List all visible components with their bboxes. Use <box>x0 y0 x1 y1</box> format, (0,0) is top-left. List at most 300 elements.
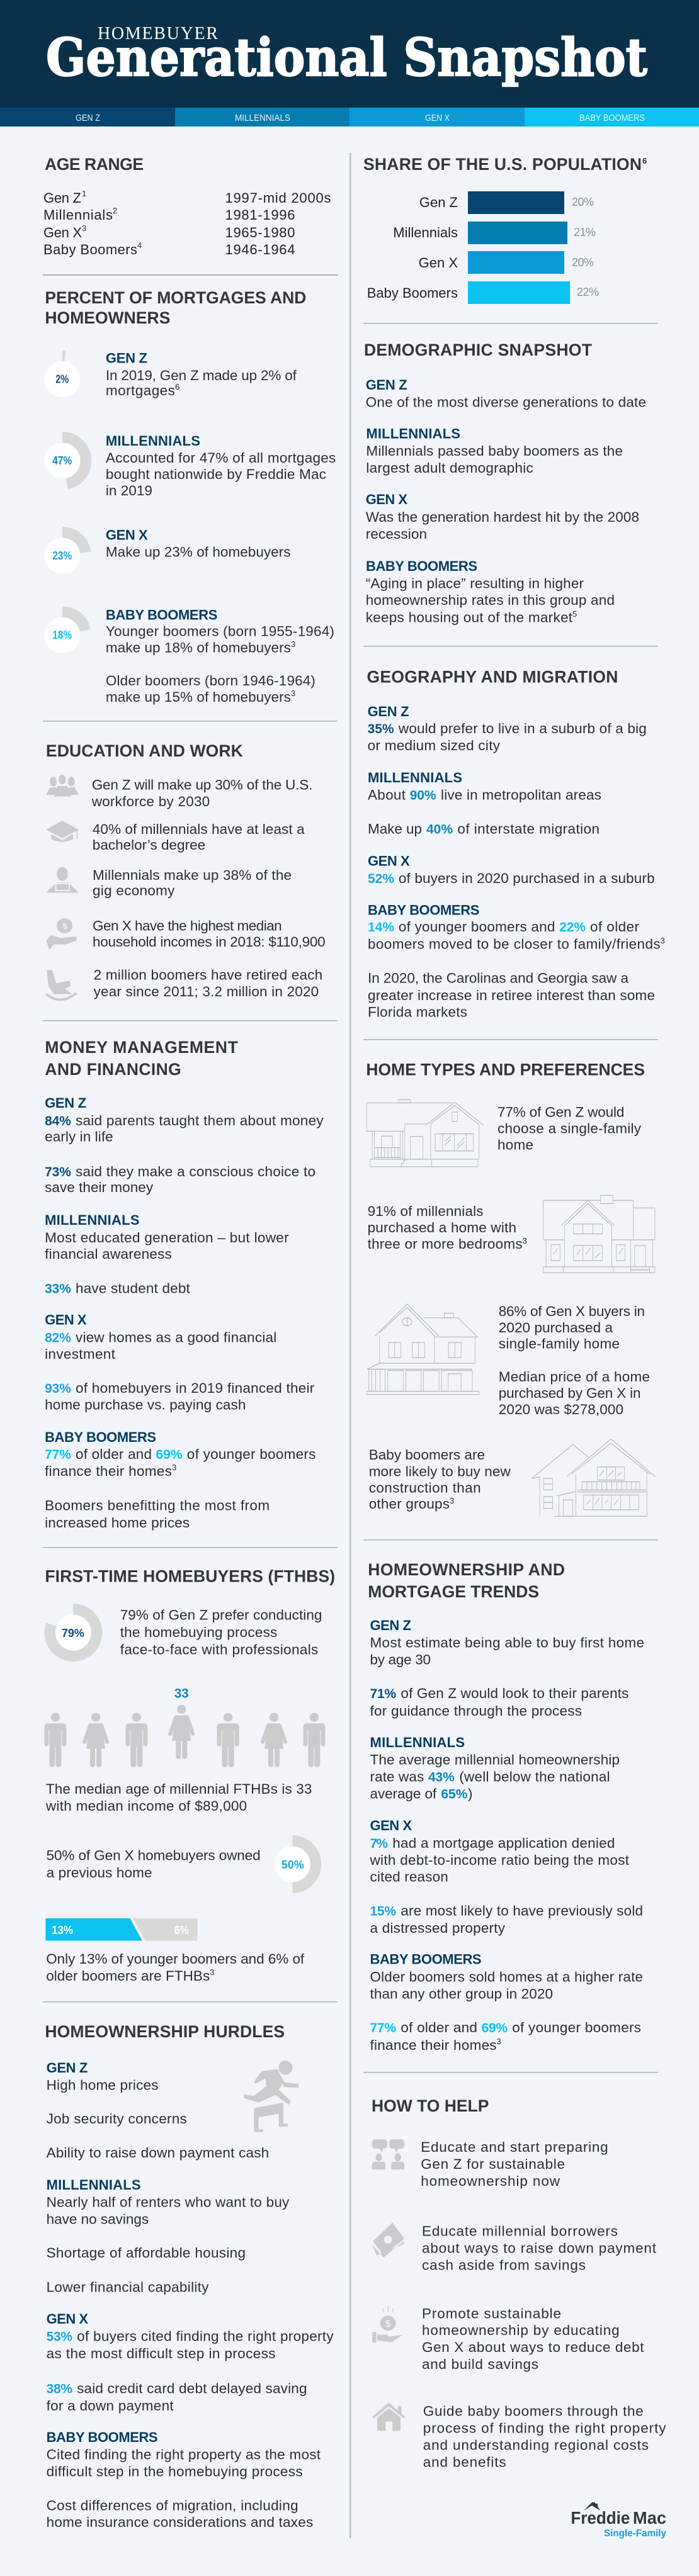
panel: homeownership and mortgage trends <box>368 1560 644 2053</box>
text block: millennials: have no savings <box>47 2212 149 2227</box>
panel: home types and preferences <box>366 1060 656 1516</box>
text block: gen x: 53% <box>47 2330 72 2344</box>
donut: millennials 47%: 47% <box>52 454 72 467</box>
text block: baby boomers: boomers moved to be closer to family/friends <box>368 936 661 952</box>
text: boomers new construction: more likely to buy new <box>369 1464 511 1479</box>
text block: gen x: home purchase vs. paying cash <box>45 1397 246 1412</box>
text block: millennials: MILLENNIALS <box>45 1212 139 1228</box>
panel: how to help <box>372 2096 666 2470</box>
text: gen x previous home: a previous home <box>47 1865 152 1881</box>
text: boomers retired <box>94 967 322 999</box>
age table: Gen X <box>43 225 82 240</box>
generation legend band <box>0 108 699 127</box>
text block: baby boomers: difficult step in the homebuying process <box>47 2464 303 2480</box>
text block: baby boomers: greater increase in retiree interest than some <box>368 987 655 1003</box>
text block: baby boomers: 69% <box>156 1448 183 1462</box>
text block: baby boomers: homeownership rates in this group and <box>366 592 615 608</box>
heading: percent of mortgages: HOMEOWNERS <box>45 308 170 327</box>
text: bachelor's degree: 40% of millennials have at least a <box>93 821 305 837</box>
panel: money management and financing <box>45 1038 324 1531</box>
text: gen x: Make up 23% of homebuyers <box>106 544 291 560</box>
text: gen x home: single-family home <box>499 1336 620 1352</box>
text block: baby boomers: finance their homes <box>45 1463 172 1479</box>
text block: millennials <box>45 1212 289 1296</box>
text block: millennials: largest adult demographic <box>366 460 533 476</box>
icon: house 2 <box>543 1195 655 1273</box>
text block: baby boomers: Older boomers sold homes at a higher rate <box>370 1969 643 1985</box>
text: gen x home <box>499 1303 650 1417</box>
text block: gen z: GEN Z <box>368 704 409 719</box>
text block: gen x: with debt-to-income ratio being the most <box>369 1852 630 1868</box>
heading: homeownership hurdles: HOMEOWNERSHIP HURDLES <box>45 2022 285 2041</box>
text: baby boomers: Older boomers (born 1946-1964) <box>106 673 315 689</box>
text block: baby boomers: of younger boomers <box>512 2020 641 2035</box>
age table: 2 <box>113 206 117 215</box>
text block: gen z: One of the most diverse generations to date <box>366 394 646 410</box>
text: gig economy: Millennials make up 38% of the <box>93 867 292 883</box>
text block: millennials: financial awareness <box>45 1246 172 1262</box>
text: millennial bedrooms <box>368 1203 527 1252</box>
text block: gen z: GEN Z <box>47 2060 88 2076</box>
text block: baby boomers: BABY BOOMERS <box>366 558 477 574</box>
text block: gen x: GEN X <box>366 492 407 507</box>
donut: baby boomers 18%: 18% <box>52 629 72 641</box>
text block: gen x: a distressed property <box>370 1920 506 1936</box>
text: gen x home: 2020 purchased a <box>499 1320 613 1336</box>
icon: group of people <box>46 775 79 797</box>
bar chart <box>367 191 599 304</box>
text block: gen x: had a mortgage application denied <box>392 1835 615 1851</box>
icon: hand with dollar coin: $ <box>385 2319 391 2329</box>
text block: gen z <box>45 1095 324 1195</box>
icon: hand with dollar coin <box>372 2306 403 2343</box>
text block: gen x <box>45 1312 315 1412</box>
text block: millennials: ) <box>468 1786 472 1801</box>
age table <box>43 189 331 257</box>
text block: baby boomers: 3 <box>661 936 665 945</box>
age table: 1997-mid 2000s <box>225 190 331 206</box>
text block: baby boomers: “Aging in place” resulting in higher <box>366 576 584 592</box>
text block: millennials: MILLENNIALS <box>368 770 462 785</box>
text block: gen x <box>366 492 639 542</box>
text block: baby boomers: than any other group in 2020 <box>370 1986 553 2002</box>
icon: hand with coin: $ <box>62 921 67 931</box>
text: household incomes: Gen X have the highest median <box>93 918 282 934</box>
text: gen x home: Median price of a home <box>499 1369 650 1385</box>
text: millennial help: about ways to raise down payment <box>422 2241 657 2256</box>
pictogram: row of people with median age: 33 <box>174 1686 189 1701</box>
text block: gen z: for guidance through the process <box>370 1703 582 1719</box>
donut: 50%: 50% <box>281 1859 304 1871</box>
text block: gen z <box>370 1617 644 1719</box>
text: gen x: GEN X <box>106 527 148 543</box>
text: baby boomers <box>106 607 334 705</box>
generation legend band: GEN Z <box>76 113 100 123</box>
donut: 79% <box>44 1604 102 1662</box>
text: gen x home: purchased by Gen X in <box>499 1385 641 1401</box>
text block: gen x: 82% <box>45 1330 71 1346</box>
text block: gen x: GEN X <box>47 2311 88 2327</box>
text block: millennials: The average millennial homeownership <box>370 1752 620 1768</box>
text: millennials <box>106 433 336 498</box>
text block: millennials: 65% <box>441 1787 468 1801</box>
header banner <box>0 0 699 108</box>
main title: Generational Snapshot <box>46 28 647 88</box>
text block: gen z: Ability to raise down payment cash <box>47 2145 269 2161</box>
text: millennial help <box>422 2224 657 2273</box>
text: gen z home: home <box>497 1137 533 1153</box>
text block: millennials <box>370 1735 620 1801</box>
text block: baby boomers: 22% <box>559 920 586 935</box>
text block: baby boomers: 77% <box>45 1448 71 1462</box>
bar chart: Millennials <box>393 225 458 240</box>
text block: millennials: MILLENNIALS <box>370 1735 465 1750</box>
text block: gen x: for a down payment <box>47 2398 174 2414</box>
icon: house <box>372 2403 406 2431</box>
text block: millennials: 90% <box>410 788 436 802</box>
text block: gen z <box>368 704 647 753</box>
text block: millennials: 40% <box>426 822 453 836</box>
text block: baby boomers: Cost differences of migration, including <box>47 2498 298 2514</box>
text block: gen x: cited reason <box>370 1869 448 1885</box>
text block: gen z: said parents taught them about money <box>76 1113 324 1128</box>
text: boomers help: and understanding regional costs <box>423 2437 649 2453</box>
text: face-to-face: face-to-face with professionals <box>120 1641 318 1658</box>
text block: gen x: 52% <box>368 872 394 886</box>
logo: Freddie Mac Single-Family: Freddie <box>571 2508 630 2528</box>
text: baby boomers: Younger boomers (born 1955-1964) <box>106 624 334 639</box>
heading: money management <box>45 1038 238 1079</box>
text: boomers FTHBs <box>46 1951 305 1984</box>
text block: millennials: 33% <box>45 1281 71 1296</box>
text block: millennials: Millennials passed baby boomers as the <box>366 443 623 459</box>
text block: millennials <box>368 770 601 836</box>
text: workforce: workforce by 2030 <box>91 794 210 809</box>
eyebrow title: HOMEBUYER <box>98 24 218 43</box>
text block: gen x: investment <box>45 1346 116 1362</box>
text block: gen z: 73% <box>45 1165 71 1179</box>
text: boomers new construction <box>369 1447 511 1512</box>
text block: baby boomers <box>370 1952 643 2053</box>
text block: gen z: High home prices <box>47 2078 158 2093</box>
generation legend band: BABY BOOMERS <box>579 113 645 123</box>
text block: gen x <box>47 2311 334 2414</box>
age table: 3 <box>82 223 86 233</box>
text: boomers help: Guide baby boomers through the <box>423 2403 644 2419</box>
text block: gen z <box>366 377 646 410</box>
bar chart: Gen Z <box>419 194 458 210</box>
text: baby boomers: 3 <box>291 689 295 698</box>
text: baby boomers: BABY BOOMERS <box>106 607 217 623</box>
text: millennials: bought nationwide by Freddie Mac <box>106 466 326 482</box>
age table: 1965-1980 <box>225 225 295 240</box>
icon: hurdle jumper <box>244 2061 298 2132</box>
bar chart: 21% <box>574 226 596 239</box>
text: gen z help: Educate and start preparing <box>421 2139 608 2155</box>
text: millennial bedrooms: purchased a home with <box>368 1220 516 1235</box>
donut: gen z 2% <box>44 351 81 397</box>
text block: gen x: of buyers in 2020 purchased in a suburb <box>399 870 655 886</box>
text: millennial bedrooms: three or more bedrooms <box>368 1236 523 1252</box>
text: gen x home: 86% of Gen X buyers in <box>499 1303 645 1319</box>
split bar: 13% and 6% <box>45 1918 198 1941</box>
text block: gen x: GEN X <box>370 1818 412 1833</box>
text block: gen z: 35% <box>368 722 394 736</box>
text: boomers retired: year since 2011; 3.2 million in 2020 <box>94 984 319 999</box>
text block: gen z: save their money <box>45 1179 154 1195</box>
text: boomers new construction: construction than <box>369 1480 481 1496</box>
icon: person at laptop <box>46 867 79 892</box>
text: median age: The median age of millennial FTHBs is 33 <box>46 1781 312 1797</box>
text: gen x help: Gen X about ways to reduce debt <box>422 2339 644 2355</box>
text block: gen z: would prefer to live in a suburb of a big <box>398 721 647 736</box>
text block: gen x: said credit card debt delayed saving <box>77 2381 307 2397</box>
text: face-to-face: the homebuying process <box>120 1624 277 1640</box>
text block: millennials: Most educated generation – but lower <box>45 1230 289 1246</box>
heading: first-time homebuyers: FIRST-TIME HOMEBUYERS (FTHBS) <box>45 1567 335 1586</box>
text: gen z: In 2019, Gen Z made up 2% of <box>106 368 297 383</box>
text block: baby boomers: of older and <box>401 2020 477 2035</box>
text: boomers FTHBs: 3 <box>210 1967 214 1977</box>
icon: house 4 <box>531 1439 656 1516</box>
age table: Gen Z <box>43 190 81 206</box>
text: boomers retired: 2 million boomers have retired each <box>94 967 322 983</box>
text block: gen x: 7% <box>370 1836 388 1851</box>
text: boomers help: process of finding the right property <box>423 2420 666 2436</box>
panel: education and work <box>46 741 326 999</box>
icon: hand with coin <box>46 918 76 950</box>
bar chart: Baby Boomers <box>367 285 458 301</box>
text: boomers help <box>423 2403 666 2470</box>
text block: gen x: Was the generation hardest hit by the 2008 <box>366 509 639 525</box>
text block: baby boomers: 14% <box>368 920 394 935</box>
icon: speech bubbles and people <box>372 2139 404 2169</box>
text block: gen z: GEN Z <box>366 377 407 393</box>
text block: gen z: 84% <box>45 1114 71 1128</box>
text block: millennials: have student debt <box>76 1280 191 1296</box>
donut: millennials 47% <box>44 432 91 489</box>
age table: 1 <box>82 189 86 198</box>
text block: millennials: About <box>368 787 406 802</box>
text block: millennials: (well below the national <box>459 1769 610 1785</box>
text: millennials: Accounted for 47% of all mortgages <box>106 450 336 466</box>
text: gig economy <box>93 867 292 899</box>
heading: homeownership and mortgage trends: MORTGAGE TRENDS <box>368 1582 539 1601</box>
text: face-to-face: 79% of Gen Z prefer conducting <box>120 1607 322 1623</box>
text block: millennials: Lower financial capability <box>47 2280 209 2295</box>
donut: gen x 23%: 23% <box>52 549 72 562</box>
heading: percent of mortgages: PERCENT OF MORTGAGES AND <box>45 288 306 307</box>
text block: baby boomers: increased home prices <box>45 1515 190 1531</box>
text block: gen x <box>369 1818 643 1936</box>
text block: gen x: GEN X <box>45 1312 87 1328</box>
text: boomers new construction: other groups <box>369 1496 450 1512</box>
text block: millennials: average of <box>370 1786 437 1801</box>
heading: home types: HOME TYPES AND PREFERENCES <box>366 1060 645 1079</box>
text block: baby boomers: Florida markets <box>368 1004 467 1020</box>
text block: gen z: or medium sized city <box>368 738 501 753</box>
text: household incomes <box>93 918 326 950</box>
text block: baby boomers <box>368 902 665 1020</box>
text block: baby boomers <box>47 2429 321 2530</box>
text: gen z: GEN Z <box>106 351 147 366</box>
text block: gen x: recession <box>366 526 427 542</box>
panel: percent of mortgages and homeowners <box>44 288 336 705</box>
text: boomers FTHBs: older boomers are FTHBs <box>46 1968 210 1984</box>
bar chart: 20% <box>572 256 594 269</box>
pictogram: row of people with median age <box>44 1686 325 1767</box>
text block: millennials <box>47 2177 290 2295</box>
text: gen z <box>106 351 297 398</box>
text block: baby boomers: of older <box>590 919 640 935</box>
text block: millennials: 43% <box>428 1770 455 1785</box>
split bar: 13% and 6%: 13% <box>52 1924 73 1937</box>
text block: millennials: Nearly half of renters who want to buy <box>47 2195 290 2210</box>
text: gen z home: 77% of Gen Z would <box>497 1104 624 1120</box>
text block: millennials: MILLENNIALS <box>47 2177 141 2193</box>
text block: millennials <box>366 426 623 476</box>
panel: age range <box>43 155 331 257</box>
bar chart: Gen X <box>419 255 458 271</box>
text block: baby boomers: finance their homes <box>370 2037 497 2053</box>
text block: baby boomers: 77% <box>370 2021 396 2035</box>
panel: homeownership hurdles <box>45 2022 334 2530</box>
text: gig economy: gig economy <box>93 883 175 899</box>
heading: age range: AGE RANGE <box>45 155 144 174</box>
text block: gen x: 93% <box>45 1381 71 1396</box>
text block: gen x: GEN X <box>368 853 410 869</box>
age table: Baby Boomers <box>43 242 137 257</box>
text: boomers help: and benefits <box>423 2454 506 2470</box>
text: gen z help <box>421 2139 608 2189</box>
text block: millennials: of interstate migration <box>457 821 600 836</box>
text: median age: with median income of $89,000 <box>45 1798 247 1814</box>
text: gen x <box>106 527 291 560</box>
text block: baby boomers: BABY BOOMERS <box>47 2429 158 2445</box>
text block: baby boomers: 69% <box>482 2021 508 2035</box>
split bar: 13% and 6%: 6% <box>174 1924 189 1937</box>
text: gen x help <box>422 2305 644 2372</box>
icon: rocking chair <box>46 970 76 999</box>
text: gen z home: choose a single-family <box>497 1120 642 1137</box>
text block: gen z: early in life <box>45 1129 113 1145</box>
text: household incomes: household incomes in 2018: $110,900 <box>93 934 326 950</box>
age table: 4 <box>137 240 142 250</box>
text: boomers new construction: Baby boomers are <box>369 1447 485 1463</box>
text: baby boomers: make up 15% of homebuyers <box>106 689 291 705</box>
text block: gen z: Job security concerns <box>47 2111 187 2127</box>
text block: baby boomers: 3 <box>172 1463 176 1472</box>
text block: baby boomers: In 2020, the Carolinas and Georgia saw a <box>368 970 628 986</box>
text block: gen z: by age 30 <box>370 1652 431 1668</box>
logo: Freddie Mac Single-Family <box>571 2502 666 2539</box>
text: millennial bedrooms: 91% of millennials <box>368 1203 484 1219</box>
text block: millennials: Shortage of affordable housing <box>47 2245 246 2261</box>
text: boomers FTHBs: Only 13% of younger boomers and 6% of <box>46 1951 305 1967</box>
text block: baby boomers: keeps housing out of the market <box>366 610 573 626</box>
text block: baby boomers <box>366 558 615 626</box>
text: gen x previous home <box>47 1847 261 1881</box>
text: millennials: MILLENNIALS <box>106 433 200 449</box>
logo: Freddie Mac Single-Family: Single-Family <box>604 2528 666 2539</box>
text block: baby boomers: Cited finding the right property as the most <box>47 2447 321 2462</box>
text block: millennials: rate was <box>370 1769 424 1785</box>
text: gen x previous home: 50% of Gen X homebuyers owned <box>47 1847 261 1863</box>
panel: geography and migration <box>367 667 665 1020</box>
text block: baby boomers: 5 <box>572 609 577 619</box>
text block: gen z <box>47 2060 269 2161</box>
icon: house 3 <box>367 1304 479 1395</box>
bar chart: 22% <box>577 286 599 298</box>
text: median age <box>45 1781 312 1814</box>
text block: gen x: are most likely to have previously sold <box>401 1903 643 1918</box>
text block: gen z: said they make a conscious choice to <box>76 1164 315 1179</box>
donut: gen x 23% <box>44 527 91 574</box>
text block: baby boomers <box>45 1429 315 1531</box>
text block: gen z: GEN Z <box>45 1095 86 1111</box>
heading: share of population: SHARE OF THE U.S. POPULATION <box>363 155 642 174</box>
donut: 79%: 79% <box>62 1627 84 1640</box>
text: bachelor's degree: bachelor’s degree <box>93 837 205 853</box>
text: gen z help: Gen Z for sustainable <box>421 2156 565 2172</box>
text: gen x home: 2020 was $278,000 <box>499 1402 623 1417</box>
panel: demographic snapshot <box>364 340 646 626</box>
text block: baby boomers: BABY BOOMERS <box>368 902 479 918</box>
text: millennials: in 2019 <box>106 483 152 498</box>
text block: gen z: of Gen Z would look to their parents <box>401 1685 628 1701</box>
text: gen x help: Promote sustainable <box>422 2305 561 2321</box>
text block: baby boomers: home insurance considerations and taxes <box>47 2514 313 2530</box>
text: gen z: 6 <box>175 382 179 391</box>
text block: gen x: of homebuyers in 2019 financed their <box>76 1380 315 1396</box>
text block: gen x: 15% <box>370 1904 396 1918</box>
generation legend band: GEN X <box>425 113 450 123</box>
text: gen z: mortgages <box>106 383 175 398</box>
text block: baby boomers: Boomers benefitting the most from <box>45 1498 270 1514</box>
text: workforce: Gen Z will make up 30% of the U.S. <box>92 777 312 793</box>
text: gen z help: homeownership now <box>421 2173 560 2189</box>
heading: homeownership and mortgage trends: HOMEOWNERSHIP AND <box>368 1560 565 1579</box>
text: millennial bedrooms: 3 <box>523 1236 527 1246</box>
donut: baby boomers 18% <box>44 606 91 653</box>
text block: millennials: Make up <box>368 821 422 836</box>
heading: money management: AND FINANCING <box>45 1060 181 1079</box>
heading: homeownership and mortgage trends <box>368 1560 565 1601</box>
text block: gen x: of buyers cited finding the right property <box>77 2329 334 2344</box>
age table: 1981-1996 <box>225 207 295 223</box>
age table: 1946-1964 <box>225 242 295 257</box>
text block: millennials: live in metropolitan areas <box>441 787 601 802</box>
donut: 50% <box>275 1835 321 1893</box>
text block: baby boomers: BABY BOOMERS <box>370 1952 482 1967</box>
text: bachelor's degree <box>93 821 305 853</box>
panel: share of the U.S. population <box>363 155 647 304</box>
heading: percent of mortgages <box>45 288 306 327</box>
icon: house 1 <box>367 1100 484 1167</box>
text block: gen z: 71% <box>370 1687 396 1701</box>
bar chart: 20% <box>572 196 594 208</box>
donut: gen z 2%: 2% <box>55 373 69 385</box>
heading: share of population: 6 <box>642 156 647 166</box>
icon: graduation cap <box>46 821 79 842</box>
text block: gen z: GEN Z <box>370 1617 411 1633</box>
text: baby boomers: 3 <box>291 639 295 649</box>
text: workforce <box>91 777 312 809</box>
heading: how to help: HOW TO HELP <box>372 2096 489 2115</box>
text: gen x help: and build savings <box>422 2356 538 2372</box>
panel: first-time homebuyers <box>44 1567 335 1984</box>
age table: Millennials <box>43 207 113 223</box>
